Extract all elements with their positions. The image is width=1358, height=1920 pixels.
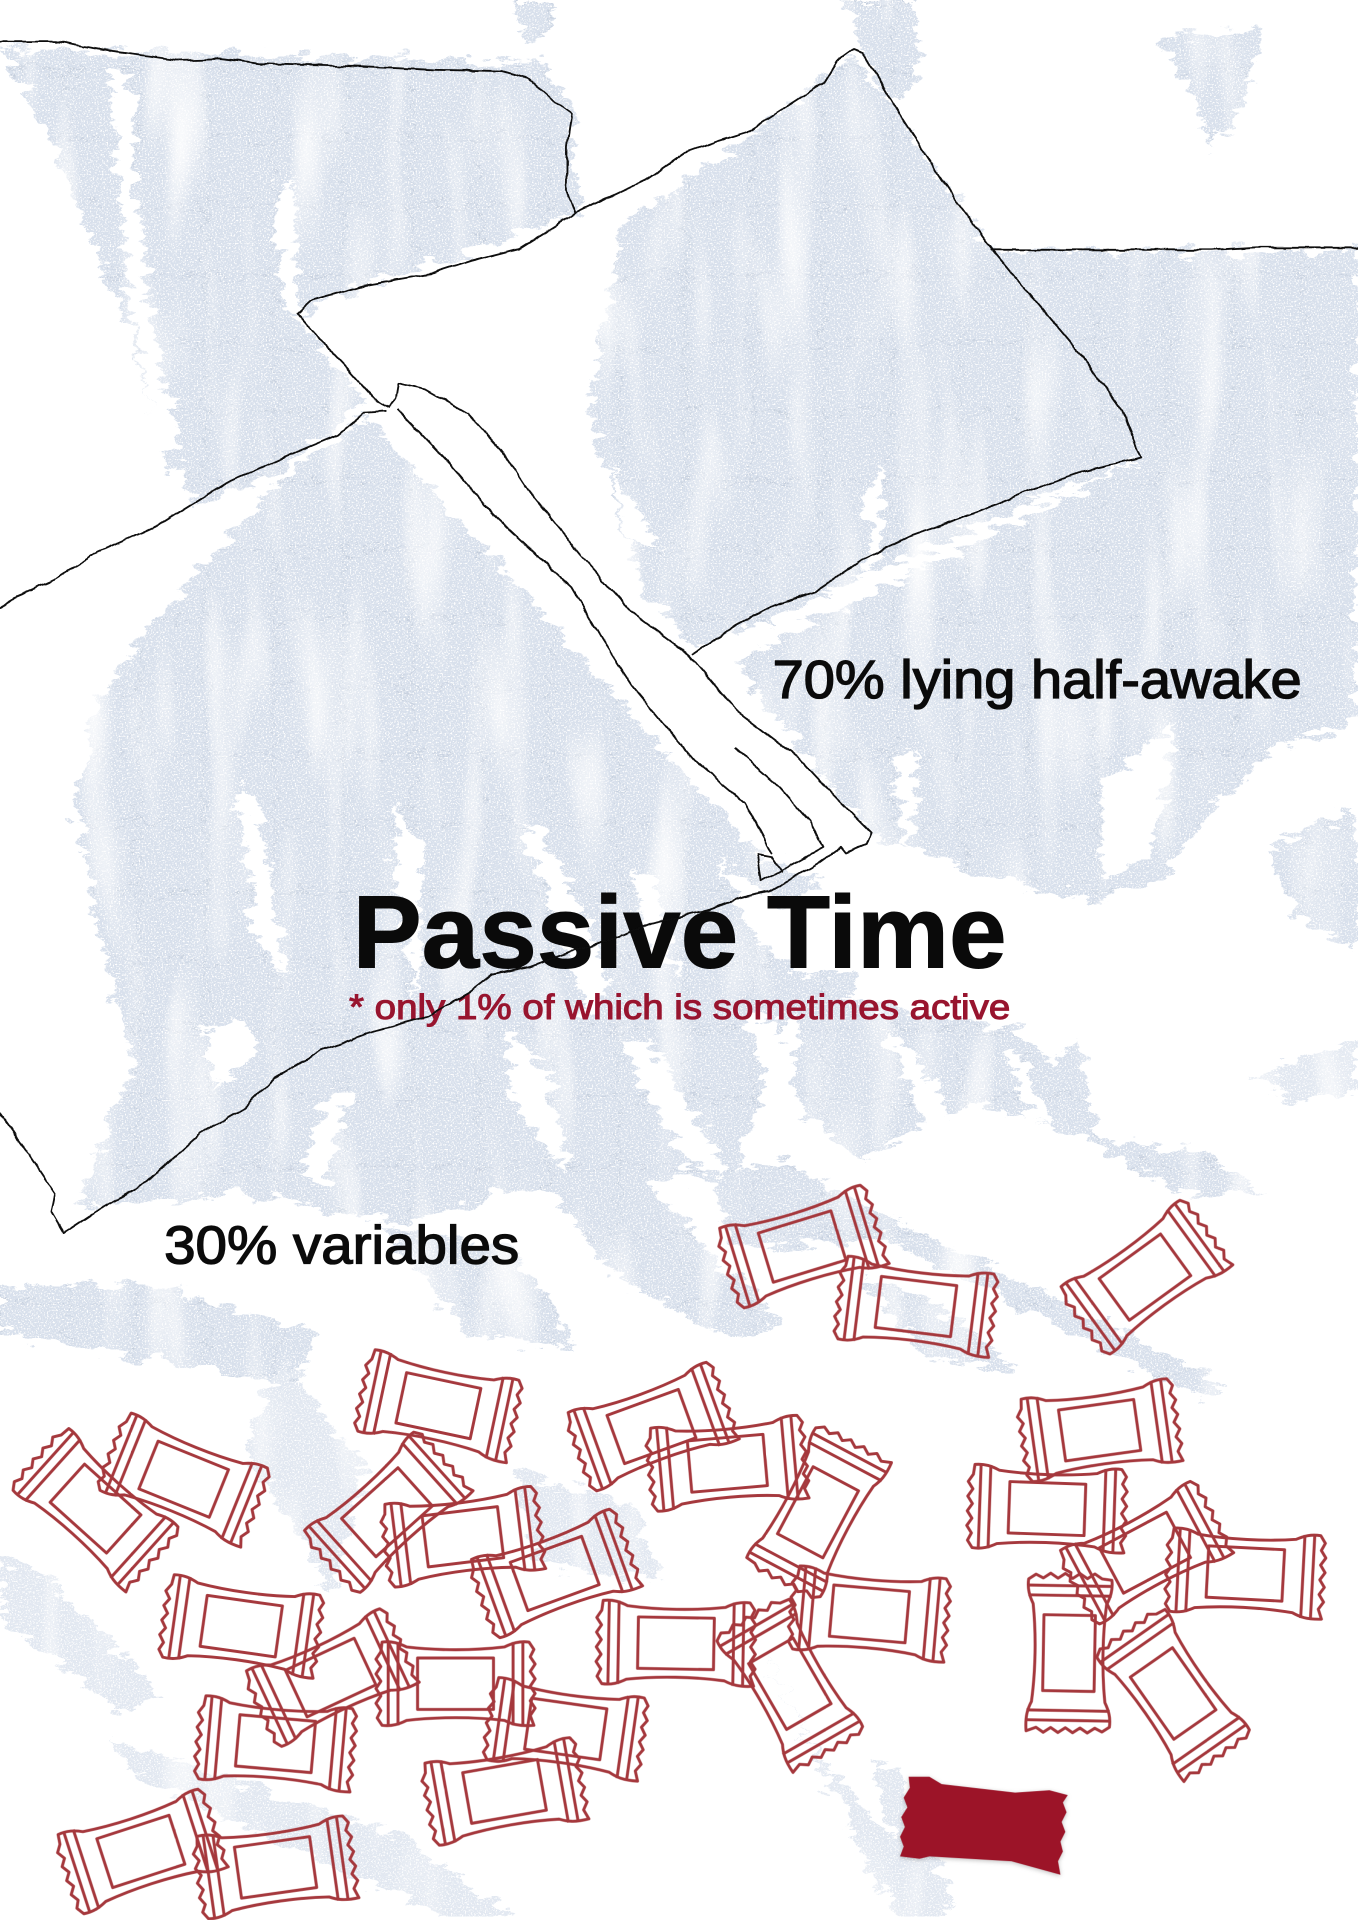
icon: candy [376, 1641, 535, 1727]
icon: candy [644, 1414, 810, 1513]
icon: candy [52, 1786, 230, 1917]
icon: candy [596, 1599, 756, 1688]
icon: candy [1164, 1527, 1327, 1620]
icon: candy [713, 1593, 867, 1774]
heading: 30% variables: 30% variables [164, 1216, 519, 1276]
icon: candy [465, 1506, 644, 1641]
subtitle: only 1% active: * only 1% of which is sometimes active [349, 988, 1010, 1027]
illustration: pillow outlines [0, 42, 1358, 1233]
icon: candy [379, 1484, 547, 1589]
icon: candy [299, 1427, 475, 1597]
icon: candy [94, 1410, 274, 1549]
title: Passive Time: Passive Time [353, 874, 1007, 989]
icon: filled red candy [900, 1777, 1068, 1875]
icon: candy [1092, 1604, 1254, 1783]
icon: candy [192, 1694, 359, 1793]
icon: candy [966, 1463, 1128, 1554]
icon: candy [743, 1422, 893, 1603]
icon: candy [191, 1814, 360, 1920]
icon: candy [786, 1564, 952, 1664]
icon: candy [156, 1573, 326, 1680]
icon: candy [713, 1182, 891, 1311]
icon: candy [1015, 1377, 1184, 1484]
group: outlined candies [8, 1182, 1327, 1920]
icon: candy [8, 1423, 183, 1594]
icon: candy [1025, 1573, 1113, 1733]
icon: candy [419, 1735, 590, 1847]
heading: 70% lying half-awake: 70% lying half-awake [773, 650, 1302, 710]
icon: candy [352, 1347, 525, 1464]
icon: candy [832, 1254, 1000, 1359]
icon: candy [481, 1675, 651, 1782]
icon: candy [240, 1605, 421, 1750]
icon: candy [562, 1359, 741, 1494]
icon: candy [1055, 1477, 1235, 1628]
icon: candy [1055, 1196, 1235, 1359]
